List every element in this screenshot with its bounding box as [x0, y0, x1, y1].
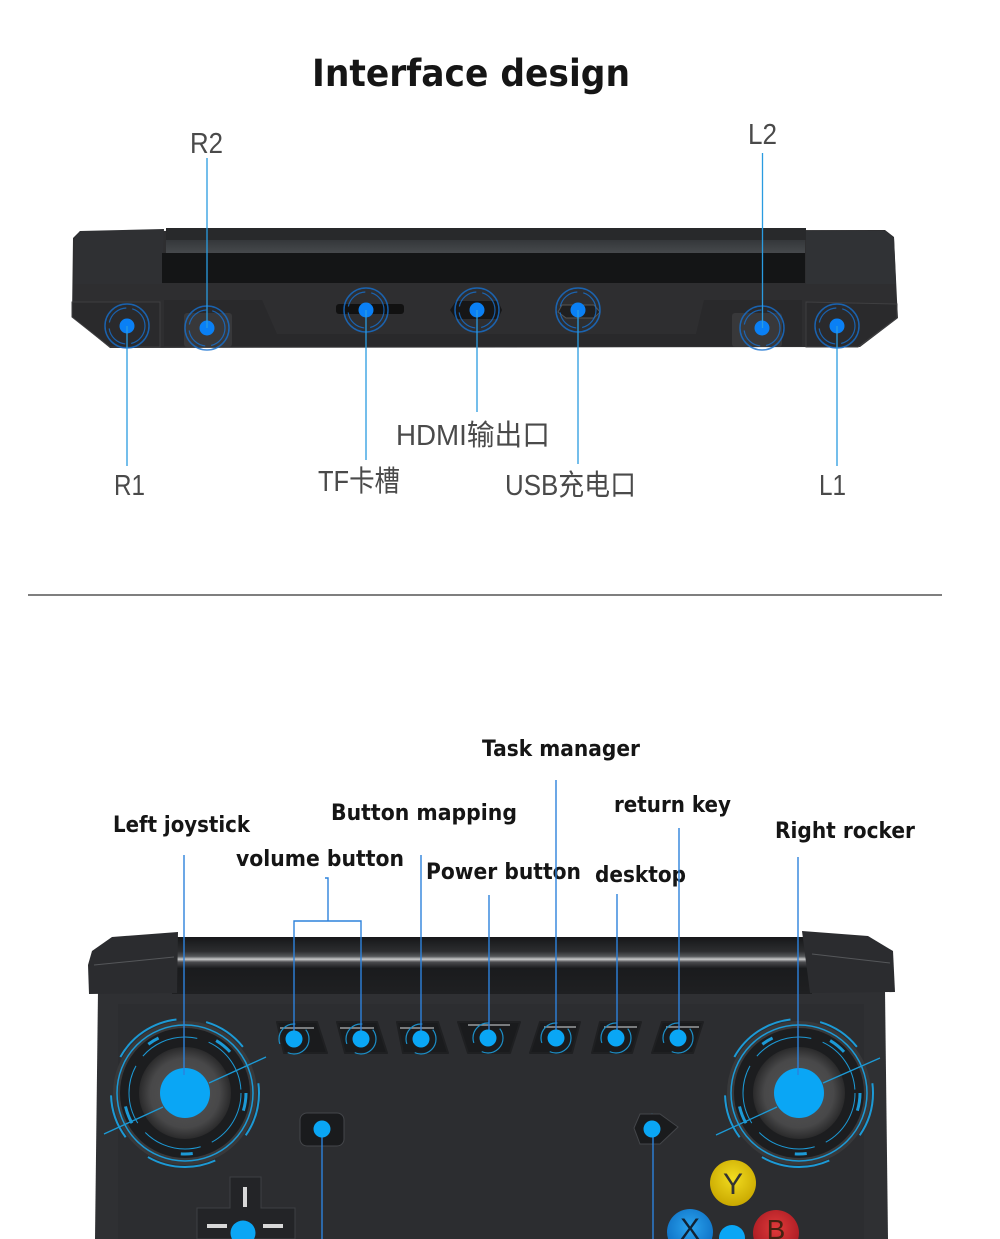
label TF slot: TF卡槽 — [318, 465, 400, 498]
button Y — [710, 1160, 756, 1206]
marker R1 — [105, 304, 149, 348]
leader lines: front view — [184, 780, 798, 1239]
marker HDMI — [455, 288, 499, 332]
right shoulder — [806, 231, 896, 284]
function buttons — [277, 1022, 703, 1053]
label return key: return key — [614, 793, 731, 818]
right joystick — [716, 1019, 880, 1167]
centre panel — [164, 300, 802, 346]
left shoulder — [74, 229, 164, 284]
label R2: R2 — [190, 128, 223, 160]
title: Interface design — [312, 52, 630, 95]
d-pad marks — [207, 1187, 283, 1228]
left trigger housing R1 — [72, 302, 160, 347]
markers: front buttons — [230, 1030, 745, 1239]
label R1: R1 — [114, 470, 145, 502]
right trigger housing L1 — [806, 302, 897, 347]
label volume button: volume button — [236, 847, 404, 872]
marker R2 — [185, 306, 229, 350]
port labels — [114, 119, 846, 502]
label L1: L1 — [819, 470, 846, 502]
marker TF — [344, 288, 388, 332]
L2 button — [732, 313, 782, 347]
select button — [634, 1114, 678, 1144]
label desktop: desktop — [595, 863, 686, 888]
back recess — [162, 228, 806, 283]
HDMI port — [450, 301, 502, 319]
marker USB — [556, 288, 600, 332]
bumper highlights — [94, 954, 890, 965]
label right rocker: Right rocker — [775, 819, 915, 844]
marker L1 — [815, 304, 859, 348]
label button mapping: Button mapping — [331, 801, 517, 826]
device body — [72, 230, 898, 348]
console body — [95, 990, 888, 1239]
button highlights — [280, 1025, 699, 1028]
R2 button — [184, 313, 232, 347]
label power button: Power button — [426, 860, 581, 885]
marker L2 — [740, 306, 784, 350]
markers: top edge ports — [105, 288, 859, 350]
d-pad — [197, 1177, 295, 1239]
button B — [753, 1210, 799, 1239]
device: top edge view — [72, 228, 898, 348]
left bumper — [88, 932, 178, 994]
divider line — [28, 594, 942, 596]
label task manager: Task manager — [482, 737, 640, 762]
USB port — [558, 305, 600, 318]
leader lines: top edge — [127, 153, 837, 466]
device: front view — [88, 931, 895, 1239]
top bar — [172, 937, 812, 994]
left joystick — [104, 1019, 266, 1167]
label HDMI: HDMI输出口 — [396, 419, 550, 452]
button glow rings — [279, 1023, 693, 1144]
TF slot — [336, 304, 404, 314]
label L2: L2 — [748, 119, 777, 151]
start button — [300, 1113, 344, 1146]
right bumper — [802, 931, 895, 993]
inner frame — [118, 1004, 864, 1239]
label left joystick: Left joystick — [113, 813, 251, 838]
button labels — [113, 737, 915, 888]
button X — [667, 1209, 713, 1239]
button Y: Y — [723, 1168, 743, 1201]
label USB: USB充电口 — [505, 469, 636, 502]
